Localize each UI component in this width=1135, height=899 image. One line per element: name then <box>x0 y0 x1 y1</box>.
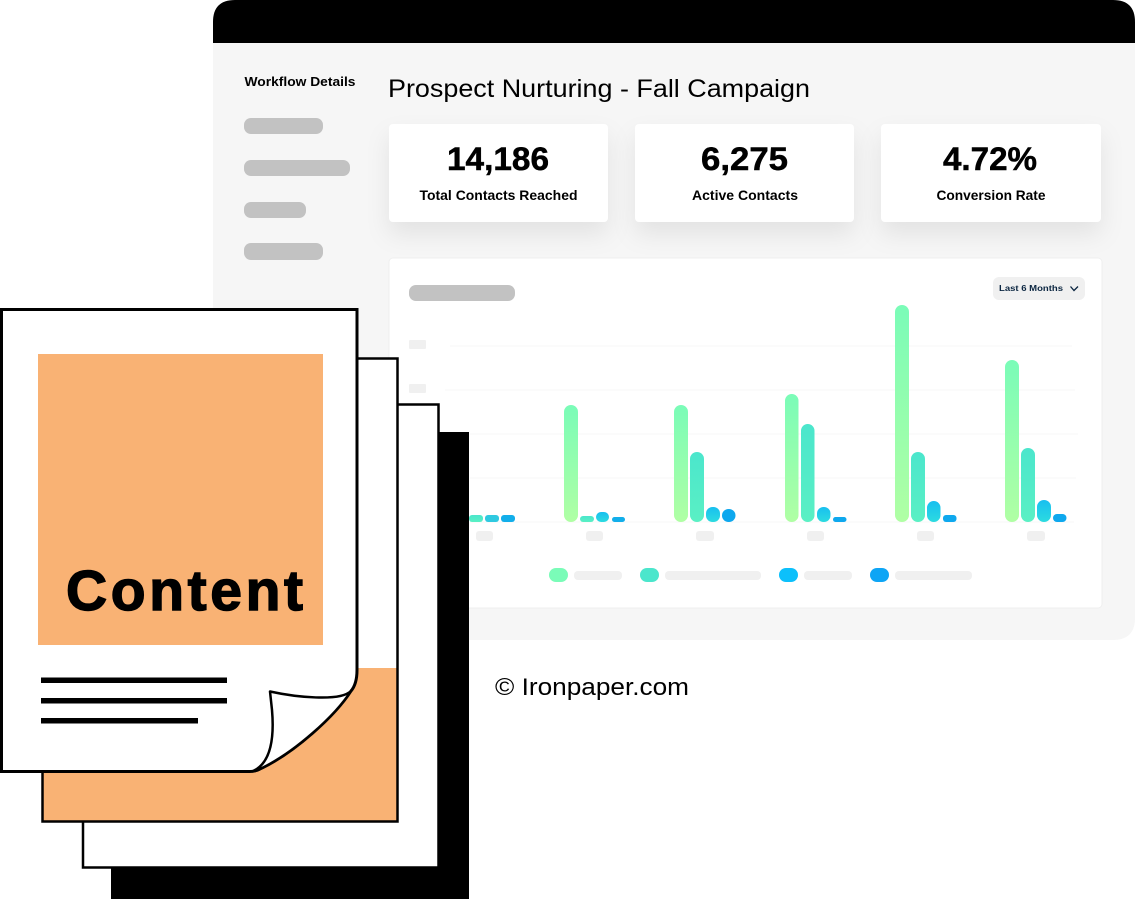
copyright text: © Ironpaper.com <box>495 674 689 701</box>
bars: month 3 <box>674 405 736 522</box>
panel: bar chart card <box>389 258 1102 608</box>
stat value: 4.72% <box>943 141 1037 177</box>
dropdown: last 6 months <box>993 277 1085 300</box>
stat card: conversion rate <box>881 124 1101 222</box>
stat card: active contacts <box>635 124 854 222</box>
orange image block <box>38 354 323 645</box>
stat label: Active Contacts <box>692 187 798 203</box>
document text lines <box>41 678 227 724</box>
chart legend <box>549 568 972 582</box>
chart gridlines <box>445 346 1078 522</box>
bars: month 1 <box>469 515 515 522</box>
sidebar heading: Workflow Details <box>244 74 356 89</box>
bars: month 2 <box>564 405 625 522</box>
bars: month 5 <box>895 305 956 522</box>
content label: Content <box>66 559 303 623</box>
panel: dashboard window <box>213 0 1135 640</box>
stat value: 14,186 <box>447 141 549 177</box>
window title bar <box>213 0 1135 43</box>
bars: month 4 <box>785 394 846 522</box>
y axis placeholders <box>409 340 426 393</box>
stat card: total contacts reached <box>389 124 608 222</box>
page curl <box>252 691 351 772</box>
stat label: Conversion Rate <box>936 187 1046 203</box>
dropdown: last 6 months: Last 6 Months <box>999 283 1063 293</box>
black back page <box>111 432 469 899</box>
chart title placeholder <box>409 285 515 301</box>
stat label: Total Contacts Reached <box>420 187 578 203</box>
heading: campaign title: Prospect Nurturing - Fall Campaign <box>388 75 810 103</box>
front page with curled corner <box>2 310 357 772</box>
chart series bars <box>469 305 1066 522</box>
panel: workflow sidebar <box>244 74 356 260</box>
x axis placeholders <box>476 531 1045 541</box>
illustration: content document stack <box>2 310 469 899</box>
second page with orange band <box>42 358 398 822</box>
bars: month 6 <box>1005 360 1066 522</box>
sidebar placeholder items <box>244 118 350 260</box>
stat value: 6,275 <box>701 141 788 177</box>
third page <box>83 404 438 868</box>
